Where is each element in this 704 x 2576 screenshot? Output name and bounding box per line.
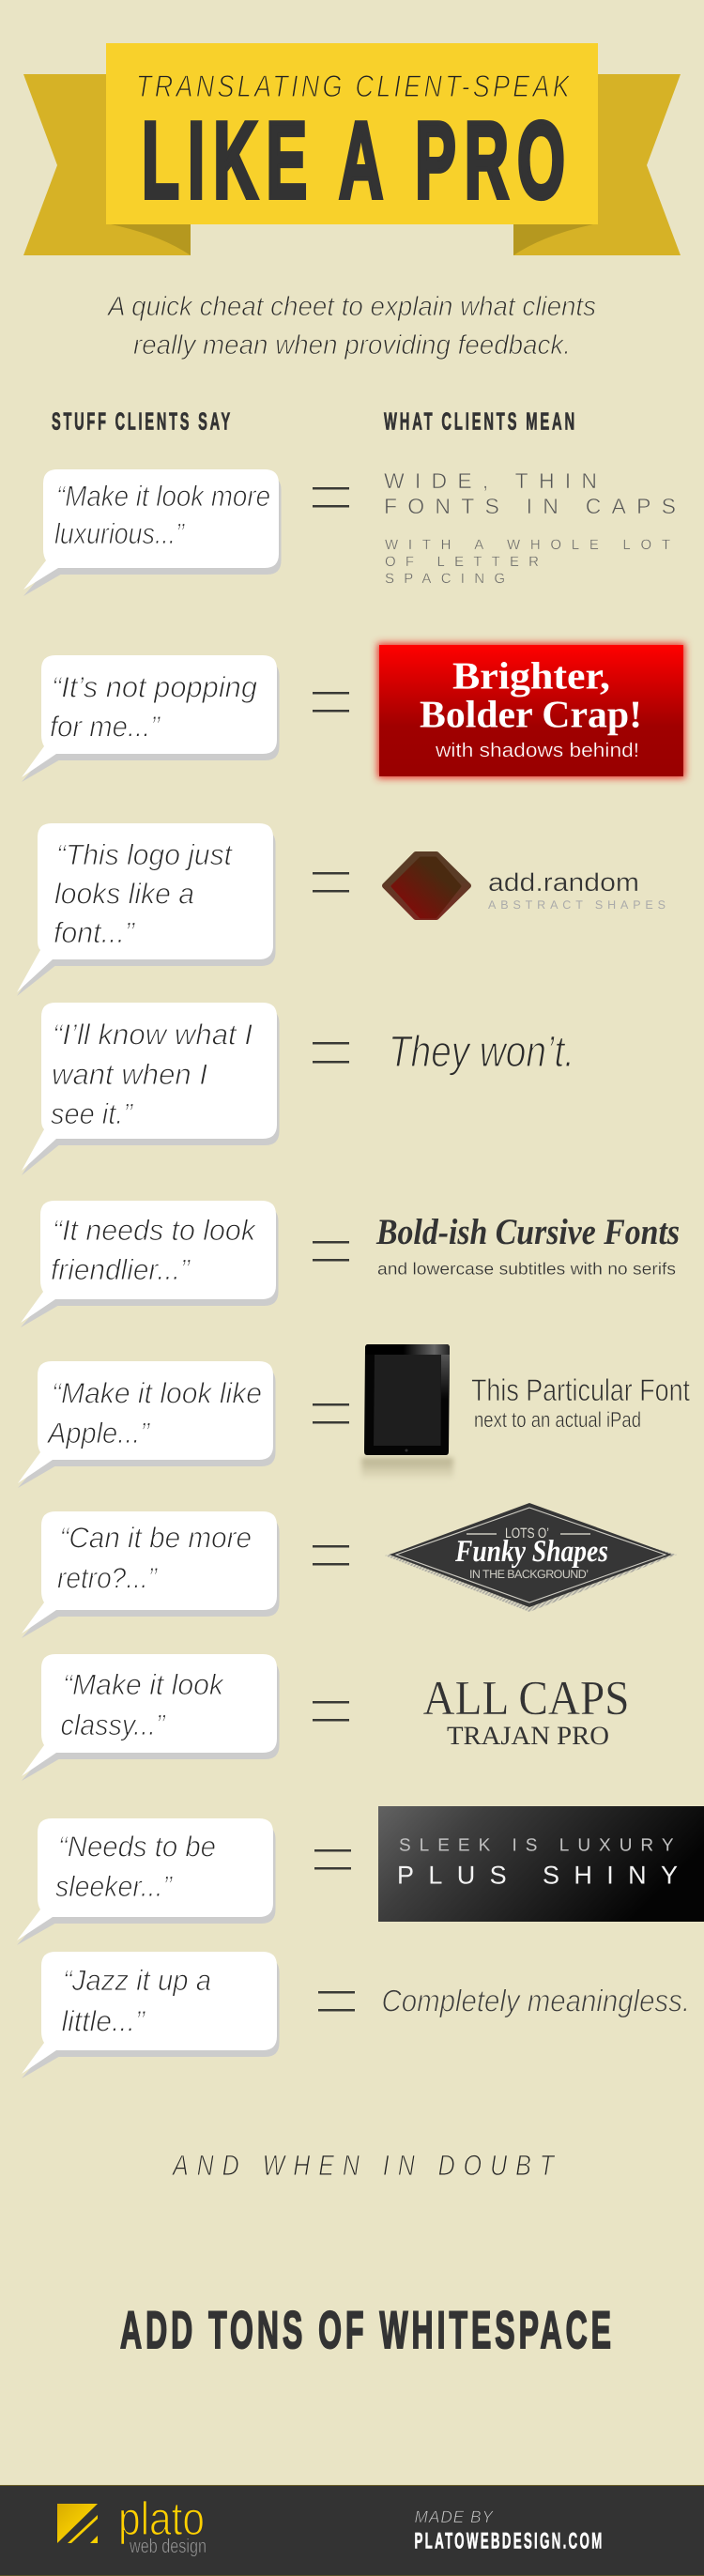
row 7 (22, 1503, 677, 1638)
speech bubble 3: “This logo just (56, 838, 233, 871)
speech bubble 7 (22, 1511, 280, 1638)
answer: wide thin caps (384, 468, 676, 587)
speech bubble 6: “Make it look like (52, 1376, 262, 1410)
answer: wide thin caps: FONTS IN CAPS (384, 494, 676, 518)
answer: red glowing box: with shadows behind! (435, 740, 639, 761)
equals sign (313, 1701, 349, 1722)
speech bubble 10 (22, 1952, 280, 2078)
speech bubble 5: friendlier...” (51, 1253, 191, 1286)
equals sign (313, 1403, 349, 1423)
ribbon left tail (23, 74, 191, 255)
speech bubble 5 (21, 1201, 278, 1327)
answer: funky diamond badge: IN THE BACKGROUND’ (469, 1568, 589, 1581)
icon: overlapping diamonds (385, 854, 468, 917)
intro text (106, 292, 596, 360)
speech bubble 3 (17, 823, 276, 996)
speech bubble 5: “It needs to look (53, 1214, 256, 1247)
equals sign (313, 1042, 349, 1063)
row 5 (21, 1201, 680, 1327)
speech bubble 6: Apple...” (46, 1417, 151, 1449)
speech bubble 9 (17, 1818, 276, 1945)
speech bubble 3: font...” (54, 916, 136, 949)
answer: cursive fonts: and lowercase subtitles with no serifs (377, 1260, 676, 1279)
speech bubble 4: see it.” (51, 1097, 134, 1130)
answer: abstract logo (385, 854, 666, 917)
answer: wide thin caps: OF LETTER (385, 554, 539, 570)
speech bubble 2: “It’s not popping (52, 670, 257, 704)
speech bubble 2 (22, 655, 280, 782)
row 2 (22, 643, 685, 782)
equals sign (313, 1241, 349, 1262)
answer: funky diamond badge (385, 1503, 677, 1612)
row 1 (23, 468, 676, 596)
speech bubble 10: “Jazz it up a (63, 1964, 211, 1997)
ribbon right tail (513, 74, 681, 255)
speech bubble 2: for me...” (50, 710, 161, 744)
answer: red glowing box (377, 643, 685, 778)
speech bubble 3: looks like a (54, 877, 194, 911)
speech bubble 8: “Make it look (63, 1668, 224, 1701)
speech bubble 9: sleeker...” (55, 1870, 174, 1903)
answer: trajan caps (422, 1672, 629, 1751)
row 4 (22, 1003, 574, 1175)
answer: abstract logo: add.random (488, 868, 639, 897)
speech bubble 1: luxurious...” (54, 517, 185, 550)
icon: iPad (361, 1344, 453, 1480)
closing kicker: AND WHEN IN DOUBT (171, 2149, 562, 2182)
row 6 (18, 1344, 690, 1488)
answer: wide thin caps: WIDE, THIN (384, 468, 597, 493)
answer: sleek dark panel: PLUS SHINY (397, 1861, 678, 1889)
ribbon left fold (111, 224, 191, 255)
answer: cursive fonts (375, 1212, 680, 1279)
row 3 (17, 823, 666, 996)
equals sign (318, 1991, 355, 2011)
row 9 (17, 1806, 704, 1945)
row 8 (22, 1654, 629, 1781)
made by: MADE BY (415, 2507, 495, 2526)
answer: sleek dark panel: SLEEK IS LUXURY (399, 1836, 674, 1855)
speech bubble 1 (23, 469, 282, 596)
banner panel (106, 43, 598, 224)
answer: red glowing box: Brighter, (452, 653, 610, 698)
footer (0, 2485, 704, 2576)
speech bubble 10: little...” (62, 2005, 146, 2037)
speech bubble 7: “Can it be more (60, 1521, 252, 1555)
equals sign (313, 692, 349, 712)
row 10 (22, 1952, 690, 2078)
title banner (23, 43, 681, 255)
answer: sleek dark panel (378, 1806, 704, 1922)
title kicker: TRANSLATING CLIENT-SPEAK (136, 69, 573, 103)
speech bubble 8 (22, 1654, 280, 1781)
answer: funky diamond badge: Funky Shapes (454, 1535, 608, 1569)
answer: particular font: next to an actual iPad (474, 1407, 641, 1432)
speech bubble 7: retro?...” (57, 1562, 159, 1594)
speech bubble 8: classy...” (60, 1709, 166, 1741)
answer: funky diamond badge: LOTS O’ (505, 1526, 549, 1541)
ribbon right fold (513, 224, 593, 255)
footer bar (0, 2485, 704, 2576)
speech bubble 4 (22, 1003, 280, 1175)
web design tagline: web design (129, 2536, 207, 2557)
speech bubble 6 (18, 1361, 276, 1488)
answer: red glowing box: Bolder Crap! (420, 693, 642, 736)
answer: wide thin caps: SPACING (385, 571, 505, 587)
icon: plato logo mark (57, 2504, 98, 2543)
equals sign (313, 487, 349, 507)
answer: trajan caps: TRAJAN PRO (447, 1722, 609, 1751)
speech bubble 9: “Needs to be (58, 1831, 216, 1863)
plato wordmark: plato (118, 2492, 205, 2545)
speech bubble 4: “I’ll know what I (53, 1018, 253, 1051)
intro text: A quick cheat cheet to explain what clients (106, 292, 596, 322)
answer: wide thin caps: WITH A WHOLE LOT (385, 537, 670, 553)
speech bubble 4: want when I (52, 1058, 207, 1091)
column heading: stuff clients say: STUFF CLIENTS SAY (52, 407, 233, 436)
answer: trajan caps: ALL CAPS (422, 1672, 629, 1725)
equals sign (313, 872, 349, 892)
answer: abstract logo: ABSTRACT SHAPES (488, 898, 666, 912)
equals sign (314, 1849, 351, 1870)
answer: particular font (471, 1372, 690, 1432)
answer: they won't: They won’t. (389, 1026, 574, 1076)
intro text: really mean when providing feedback. (133, 330, 571, 360)
speech bubble 1: “Make it look more (56, 480, 270, 513)
equals sign (313, 1545, 349, 1566)
